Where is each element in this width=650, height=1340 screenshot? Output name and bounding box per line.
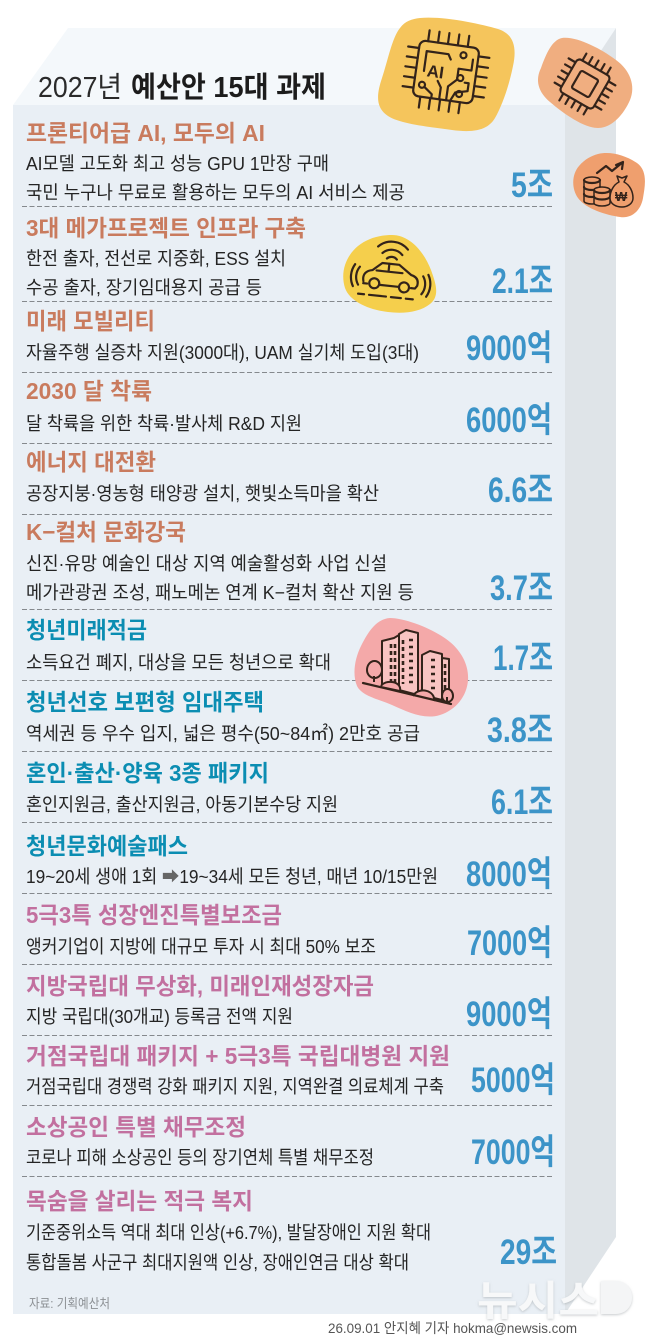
- row 5: 에너지 대전환: 에너지 대전환: [26, 449, 156, 475]
- row 6: K-컬처 문화강국: K−컬처 문화강국: [26, 519, 186, 545]
- row 4: 2030 달 착륙: 달 착륙을 위한 착륙·발사체 R&D 지원: [26, 413, 302, 434]
- row 4: 2030 달 착륙: 6000억: [466, 401, 552, 440]
- row 14: 소상공인: 코로나 피해 소상공인 등의 장기연체 특별 채무조정: [26, 1147, 374, 1168]
- icon: autonomous car: [343, 235, 436, 313]
- row 9: 혼인·출산·양육: 혼인지원금, 출산지원금, 아동기본수당 지원: [26, 794, 338, 815]
- row 12: 지방국립대: 지방 국립대(30개교) 등록금 전액 지원: [26, 1006, 293, 1027]
- row 10: 청년문화예술패스: 청년문화예술패스: [26, 833, 188, 859]
- row 9: 혼인·출산·양육: [22, 760, 553, 822]
- row 14: 소상공인: 7000억: [471, 1133, 555, 1172]
- title: 예산안 15대 과제: [131, 71, 326, 104]
- row 6: K-컬처 문화강국: 메가관광권 조성, 패노메논 연계 K−컬처 확산 지원 등: [26, 582, 414, 603]
- row 3: 미래 모빌리티: 9000억: [466, 329, 552, 368]
- row 10: 청년문화예술패스: [22, 833, 553, 894]
- row 12: 지방국립대: 지방국립대 무상화, 미래인재성장자금: [26, 973, 374, 999]
- row 5: 에너지 대전환: 6.6조: [488, 471, 553, 510]
- row 1: 프론티어급 AI: 5조: [511, 166, 553, 205]
- row 8: 청년선호 보편형 임대주택: 청년선호 보편형 임대주택: [26, 689, 264, 715]
- row 5: 에너지 대전환: [22, 449, 553, 514]
- row 15: 목숨을 살리는 적극 복지: 기준중위소득 역대 최대 인상(+6.7%), 발달장애인 지원 확대: [26, 1222, 431, 1243]
- row 13: 거점국립대: 거점국립대 패키지 + 5극3특 국립대병원 지원: [26, 1043, 450, 1069]
- row 15: 목숨을 살리는 적극 복지: 통합돌봄 사군구 최대지원액 인상, 장애인연금 대상 확대: [26, 1252, 409, 1273]
- row 2: 3대 메가프로젝트: [22, 215, 553, 302]
- icon: coins and money bag: [573, 153, 645, 217]
- row 13: 거점국립대: [22, 1043, 555, 1106]
- row 11: 5극3특: [22, 902, 553, 964]
- row 1: 프론티어급 AI: [22, 120, 553, 206]
- row 12: 지방국립대: [22, 973, 553, 1036]
- row 10: 청년문화예술패스: 19~20세 생애 1회 ➡19~34세 모든 청년, 매년 10/15만원: [26, 866, 438, 887]
- row 4: 2030 달 착륙: 2030 달 착륙: [26, 378, 152, 404]
- icon: apartment buildings: [354, 618, 468, 717]
- row 10: 청년문화예술패스: 8000억: [466, 855, 552, 894]
- row 12: 지방국립대: 9000억: [466, 995, 552, 1034]
- row 7: 청년미래적금: 1.7조: [493, 639, 553, 678]
- credit: 26.09.01 안지혜 기자 hokma@newsis.com: [328, 1320, 577, 1336]
- row 11: 5극3특: 5극3특 성장엔진특별보조금: [26, 902, 282, 928]
- row 3: 미래 모빌리티: 자율주행 실증차 지원(3000대), UAM 실기체 도입(3대): [26, 342, 419, 363]
- row 7: 청년미래적금: [22, 617, 553, 680]
- row 13: 거점국립대: 거점국립대 경쟁력 강화 패키지 지원, 지역완결 의료체계 구축: [26, 1076, 444, 1097]
- row 2: 3대 메가프로젝트: 2.1조: [492, 262, 553, 301]
- row 11: 5극3특: 앵커기업이 지방에 대규모 투자 시 최대 50% 보조: [26, 936, 376, 957]
- row 2: 3대 메가프로젝트: 한전 출자, 전선로 지중화, ESS 설치: [26, 248, 286, 269]
- row 8: 청년선호 보편형 임대주택: [22, 689, 553, 752]
- row 7: 청년미래적금: 청년미래적금: [26, 617, 147, 643]
- source: 자료: 기획예산처: [29, 1296, 110, 1311]
- row 6: K-컬처 문화강국: 신진·유망 예술인 대상 지역 예술활성화 사업 신설: [26, 553, 387, 574]
- row 13: 거점국립대: 5000억: [471, 1061, 555, 1100]
- row 2: 3대 메가프로젝트: 수공 출자, 장기임대용지 공급 등: [26, 277, 262, 298]
- row 14: 소상공인: [22, 1114, 555, 1176]
- watermark: 뉴시스: [477, 1278, 599, 1324]
- row 6: K-컬처 문화강국: [22, 519, 553, 610]
- row 9: 혼인·출산·양육: 6.1조: [491, 783, 553, 822]
- icon: AI chip: [378, 18, 515, 131]
- icon: AI chip: AI: [426, 61, 445, 83]
- row 1: 프론티어급 AI: 국민 누구나 무료로 활용하는 모두의 AI 서비스 제공: [26, 182, 405, 203]
- row 15: 목숨을 살리는 적극 복지: 목숨을 살리는 적극 복지: [26, 1188, 253, 1214]
- row 4: 2030 달 착륙: [22, 378, 553, 444]
- row 3: 미래 모빌리티: [22, 308, 553, 372]
- row 6: K-컬처 문화강국: 3.7조: [490, 569, 553, 608]
- row 1: 프론티어급 AI: AI모델 고도화 최고 성능 GPU 1만장 구매: [26, 153, 329, 174]
- row 2: 3대 메가프로젝트: 3대 메가프로젝트 인프라 구축: [26, 215, 306, 241]
- row 1: 프론티어급 AI: 프론티어급 AI, 모두의 AI: [26, 120, 265, 146]
- title: [38, 71, 326, 104]
- row 3: 미래 모빌리티: 미래 모빌리티: [26, 308, 155, 334]
- row 5: 에너지 대전환: 공장지붕·영농형 태양광 설치, 햇빛소득마을 확산: [26, 483, 379, 504]
- row 7: 청년미래적금: 소득요건 폐지, 대상을 모든 청년으로 확대: [26, 652, 331, 673]
- row 15: 목숨을 살리는 적극 복지: 29조: [500, 1233, 557, 1272]
- icon: coins and money bag: ₩: [615, 189, 628, 204]
- title: 2027년: [38, 72, 122, 104]
- row 11: 5극3특: 7000억: [467, 924, 552, 963]
- row 14: 소상공인: 소상공인 특별 채무조정: [26, 1114, 246, 1140]
- row 15: 목숨을 살리는 적극 복지: [26, 1188, 557, 1273]
- icon: orange chip: [538, 38, 632, 128]
- row 8: 청년선호 보편형 임대주택: 3.8조: [487, 711, 553, 750]
- row 9: 혼인·출산·양육: 혼인·출산·양육 3종 패키지: [26, 760, 269, 786]
- row 8: 청년선호 보편형 임대주택: 역세권 등 우수 입지, 넓은 평수(50~84㎡) 2만호 공급: [26, 723, 420, 744]
